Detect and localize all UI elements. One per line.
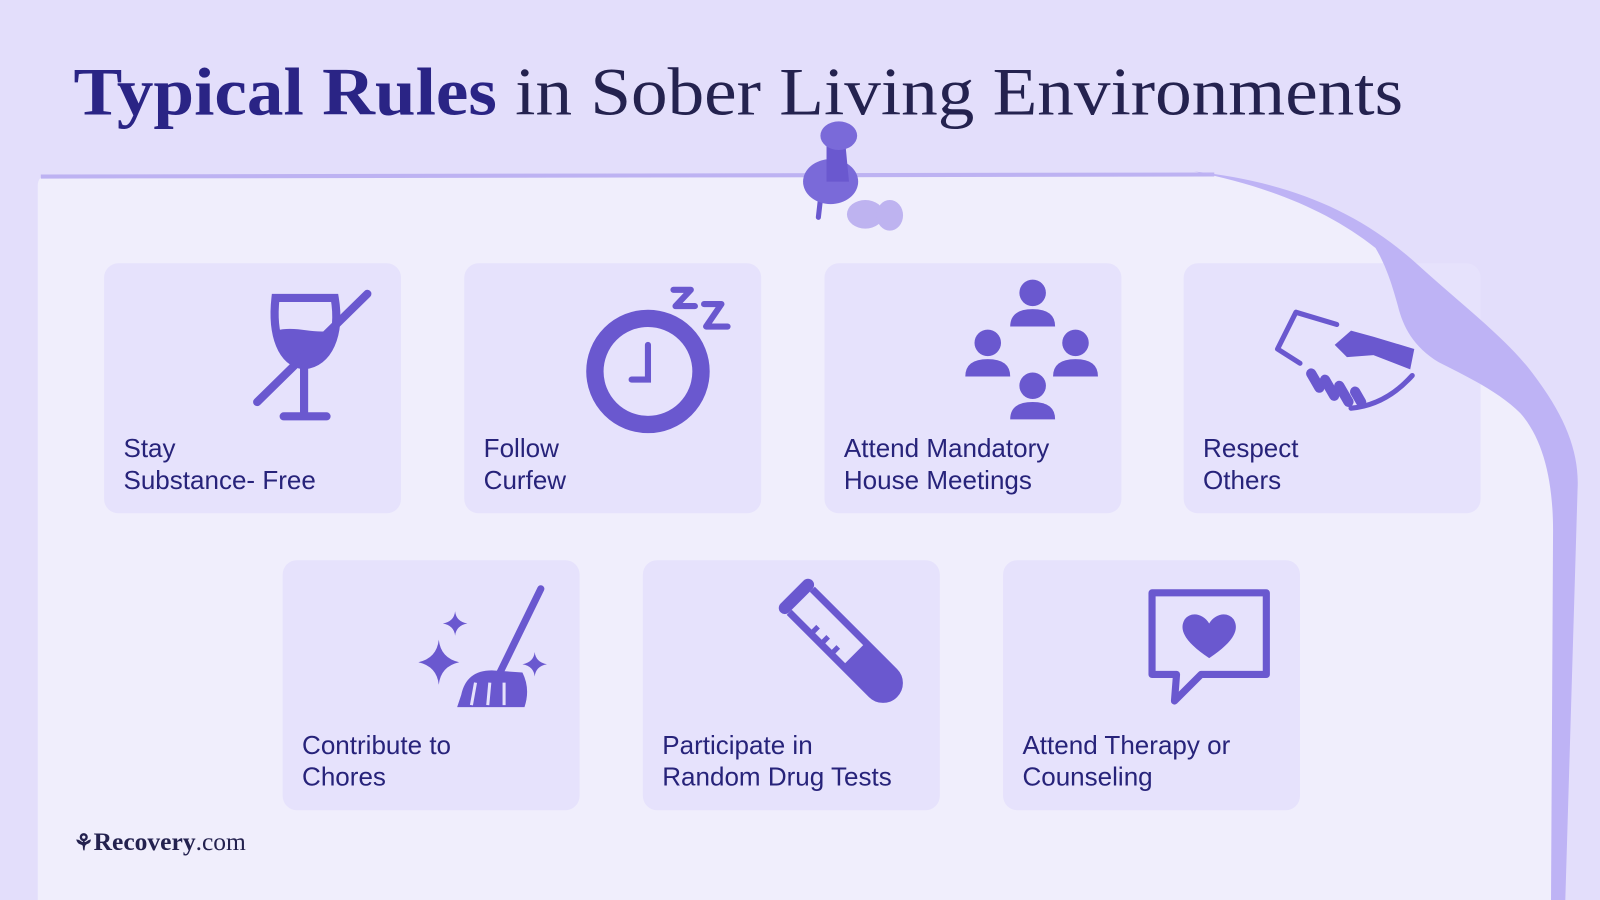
icon: group of people: [965, 280, 1098, 420]
icon: test tube: [778, 578, 903, 703]
card: random drug tests: Random Drug Tests: [662, 763, 892, 792]
card: respect others: Others: [1203, 466, 1281, 495]
card: attend house meetings: [824, 263, 1121, 513]
icon: clock with zzz: [586, 286, 731, 434]
logo: ⚘Recovery.com: [73, 829, 246, 856]
icon: handshake: [1274, 310, 1415, 411]
icon: broom with sparkles: [418, 585, 547, 708]
card: respect others: Respect: [1203, 435, 1299, 463]
icon: crossed wine glass: [253, 290, 372, 420]
card: contribute to chores: [283, 560, 580, 810]
card: random drug tests: [643, 560, 940, 810]
icon: push pin: [803, 121, 903, 231]
card: attend house meetings: Attend Mandatory: [844, 435, 1049, 463]
card: follow curfew: [464, 263, 761, 513]
icon: speech bubble with heart: [1148, 589, 1270, 705]
card: stay substance-free: [104, 263, 401, 513]
card: stay substance-free: Stay: [123, 435, 176, 463]
card: attend therapy: Attend Therapy or: [1022, 732, 1230, 760]
card: follow curfew: Curfew: [484, 466, 566, 495]
card: stay substance-free: Substance- Free: [123, 466, 316, 495]
card: contribute to chores: Contribute to: [302, 732, 451, 760]
card: respect others: [1184, 263, 1481, 513]
card: random drug tests: Participate in: [662, 732, 813, 760]
card: attend therapy: [1003, 560, 1300, 810]
card: follow curfew: Follow: [484, 435, 559, 463]
card: attend therapy: Counseling: [1022, 763, 1153, 792]
card: attend house meetings: House Meetings: [844, 466, 1032, 495]
title: Typical Rules in Sober Living Environments: [73, 54, 1403, 129]
card: contribute to chores: Chores: [302, 763, 386, 792]
